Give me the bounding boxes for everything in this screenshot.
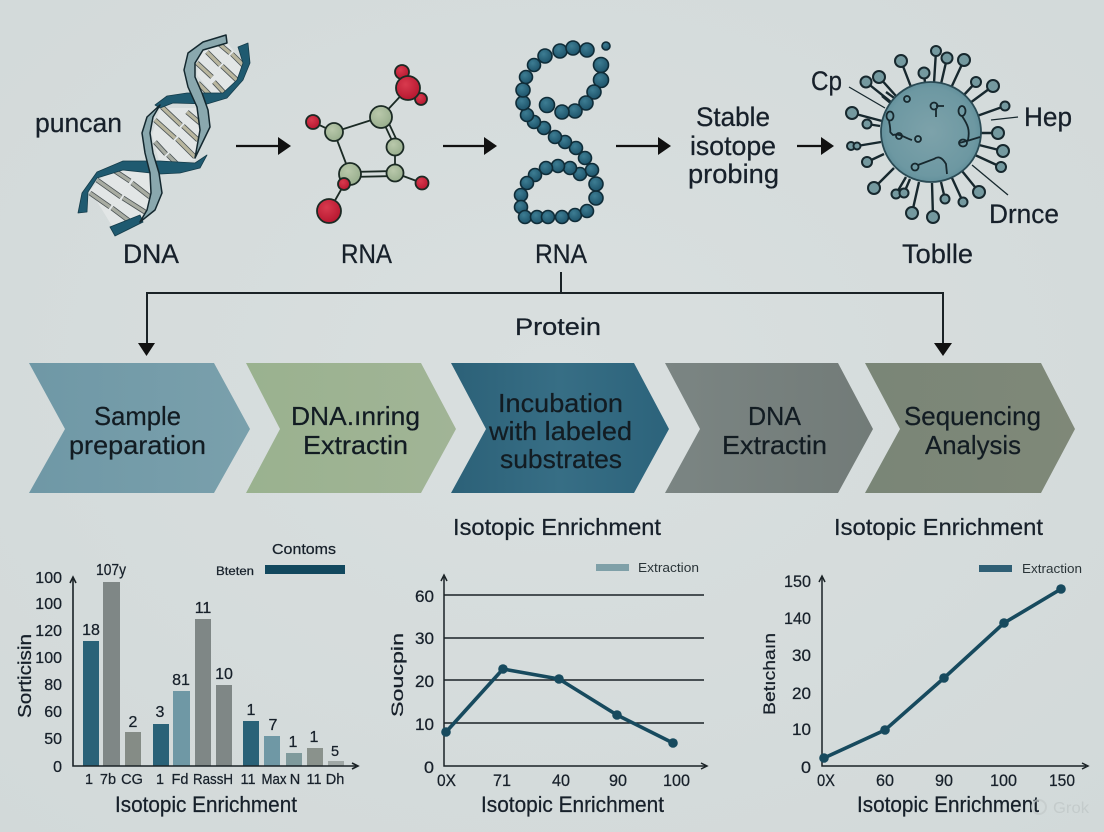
x axis labels: 40: [552, 771, 570, 790]
y axis tick labels: 10: [792, 720, 811, 739]
y axis tick labels: 20: [792, 684, 811, 703]
x axis labels: 100: [663, 771, 690, 790]
y axis tick labels: 10: [415, 715, 434, 734]
x axis labels: N: [290, 772, 300, 788]
chevron: Sample preparation: Sample: [94, 401, 181, 431]
watermark: Grok: [1032, 800, 1090, 817]
y axis tick labels: 30: [792, 646, 811, 665]
data line: [819, 584, 1066, 763]
chevron: DNA Extractin: Extractin: [303, 430, 408, 460]
arrow: probing to virus particle: [797, 137, 834, 155]
y axis tick labels: 0: [801, 758, 811, 777]
text: Stable isotope probing: [688, 102, 779, 189]
y axis tick labels: 0: [424, 758, 434, 777]
icon: bead chain strand: [514, 41, 610, 224]
chevron: DNA Extractin: DNA.ınring: [291, 401, 420, 431]
text: Stable isotope probing: isotope: [690, 131, 776, 161]
label: Hep with leader: [991, 102, 1072, 132]
chevron: Sequencing Analysis: [865, 363, 1075, 493]
chevron: DNA Extractin: [246, 363, 456, 493]
chevron: Incubation with labeled substrates: with labeled: [488, 416, 632, 446]
axes: [819, 576, 1088, 769]
y axis title: Betıchaın: [760, 633, 779, 715]
legend: bar chart: Contoms: [272, 541, 336, 558]
bar value labels: 18: [82, 622, 100, 639]
x axis title: Isotopic Enrichment: [857, 792, 1039, 817]
bar chart: left: [15, 541, 358, 817]
y axis tick labels: 80: [44, 677, 62, 694]
line chart: middle: [388, 560, 707, 817]
label: Drnce with leader: [972, 165, 1059, 229]
label: RNA: RNA: [535, 239, 587, 269]
y axis tick labels: [784, 572, 811, 777]
y axis tick labels: [415, 587, 434, 777]
chevron: Incubation with labeled substrates: substrates: [500, 444, 622, 474]
y axis tick labels: 120: [35, 623, 62, 640]
label: Cp with leader: [811, 66, 885, 108]
x axis labels: Fd: [172, 772, 188, 788]
legend: right chart: Extraction: [1022, 561, 1082, 576]
bars: [83, 582, 344, 766]
bar value labels: 7: [269, 717, 278, 734]
chevron: DNA Extractin: Extractin: [722, 430, 827, 460]
arrow: bead chain to stable isotope probing: [616, 137, 671, 155]
y axis tick labels: 20: [415, 672, 434, 691]
x axis labels: 71: [493, 771, 511, 790]
x axis labels: CG: [121, 772, 143, 788]
x axis labels: 90: [609, 771, 627, 790]
y axis tick labels: 100: [35, 596, 62, 613]
chevron: DNA Extractin: DNA: [748, 401, 802, 431]
grid and axes: [441, 575, 707, 769]
y axis tick labels: 50: [44, 731, 62, 748]
text: Stable isotope probing: Stable: [696, 102, 770, 132]
chevron: Incubation with labeled substrates: Incubation: [498, 388, 623, 418]
x axis labels: 1: [85, 772, 93, 788]
x axis labels: [85, 772, 344, 788]
y axis tick labels: 140: [784, 609, 811, 628]
bar value labels: 1: [247, 702, 256, 719]
icon: RNA molecule: [306, 65, 428, 223]
chevron: DNA Extractin: [665, 363, 873, 493]
label: Drnce with leader: Drnce: [989, 199, 1059, 229]
x axis title: Isotopic Enrichment: [481, 792, 664, 817]
x axis labels: 0X: [817, 771, 835, 790]
x axis labels: [437, 771, 690, 790]
chevron: Sequencing Analysis: Analysis: [925, 430, 1021, 460]
icon: DNA double helix: [78, 35, 250, 236]
heading: Isotopic Enrichment (middle chart): Isotopic Enrichment: [453, 514, 662, 540]
chevron: Sequencing Analysis: Sequencing: [904, 401, 1041, 431]
axes: [70, 577, 358, 769]
legend: middle chart: Extraction: [638, 560, 699, 575]
x axis labels: RassH: [193, 772, 233, 788]
y axis tick labels: [35, 570, 62, 776]
label: RNA: RNA: [341, 239, 392, 269]
data line: [441, 664, 678, 748]
label: DNA: DNA: [123, 239, 179, 269]
bar value labels: 1: [310, 729, 319, 746]
icon: virus particle with spikes: [846, 46, 1010, 223]
x axis labels: Dh: [326, 772, 344, 788]
y axis title: Soucpin: [388, 633, 407, 717]
x axis title: Isotopic Enrichment: [115, 792, 297, 817]
y axis tick labels: 60: [44, 704, 62, 721]
x axis labels: 0X: [437, 771, 456, 790]
x axis labels: 150: [1049, 771, 1075, 790]
chevron: Sample preparation: preparation: [69, 430, 206, 460]
bar value labels: 10: [215, 666, 233, 683]
x axis labels: 90: [935, 771, 953, 790]
chevron: Sample preparation: [29, 363, 250, 493]
x axis labels: 100: [990, 771, 1017, 790]
arrow: RNA to bead chain: [443, 137, 497, 155]
bar value labels: 2: [129, 714, 138, 731]
heading: Isotopic Enrichment (right chart): Isotopic Enrichment: [834, 514, 1044, 540]
bar value labels: 107y: [96, 562, 126, 579]
y axis tick labels: 150: [784, 572, 811, 591]
legend: middle chart: [596, 560, 699, 575]
bar value labels: 3: [156, 704, 165, 721]
y axis tick labels: 100: [35, 650, 62, 667]
connector: branching arrows to pipeline: [138, 272, 952, 356]
text: Stable isotope probing: probing: [688, 159, 779, 189]
y axis title: Sorticisin: [15, 634, 35, 718]
bar value labels: 1: [289, 734, 298, 751]
arrow: DNA to RNA: [236, 137, 291, 155]
watermark: Grok: Grok: [1053, 800, 1090, 817]
bar value labels: 5: [331, 744, 339, 760]
x axis labels: 7b: [100, 772, 116, 788]
label: puncan: puncan: [35, 108, 122, 138]
x axis labels: 11: [306, 772, 322, 788]
y axis tick labels: 100: [35, 570, 62, 587]
bar value labels: [82, 562, 339, 760]
x axis labels: 1: [156, 772, 164, 788]
legend: bar chart: Bteten: [216, 564, 254, 578]
y axis tick labels: 30: [415, 629, 434, 648]
label: Hep with leader: Hep: [1024, 102, 1072, 132]
label: Protein: Protein: [515, 314, 601, 341]
bar value labels: 11: [195, 600, 211, 617]
label: Toblle: Toblle: [902, 239, 973, 269]
y axis tick labels: 0: [53, 759, 62, 776]
chevron: Incubation with labeled substrates: [451, 363, 669, 493]
bar value labels: 81: [172, 672, 190, 689]
legend: bar chart: [216, 541, 345, 578]
x axis labels: 60: [876, 771, 894, 790]
legend: right chart: [979, 561, 1082, 576]
label: Cp with leader: Cp: [811, 66, 842, 96]
y axis tick labels: 60: [415, 587, 434, 606]
x axis labels: Max: [262, 772, 287, 788]
x axis labels: [817, 771, 1075, 790]
x axis labels: 11: [240, 772, 256, 788]
line chart: right: [760, 561, 1088, 817]
